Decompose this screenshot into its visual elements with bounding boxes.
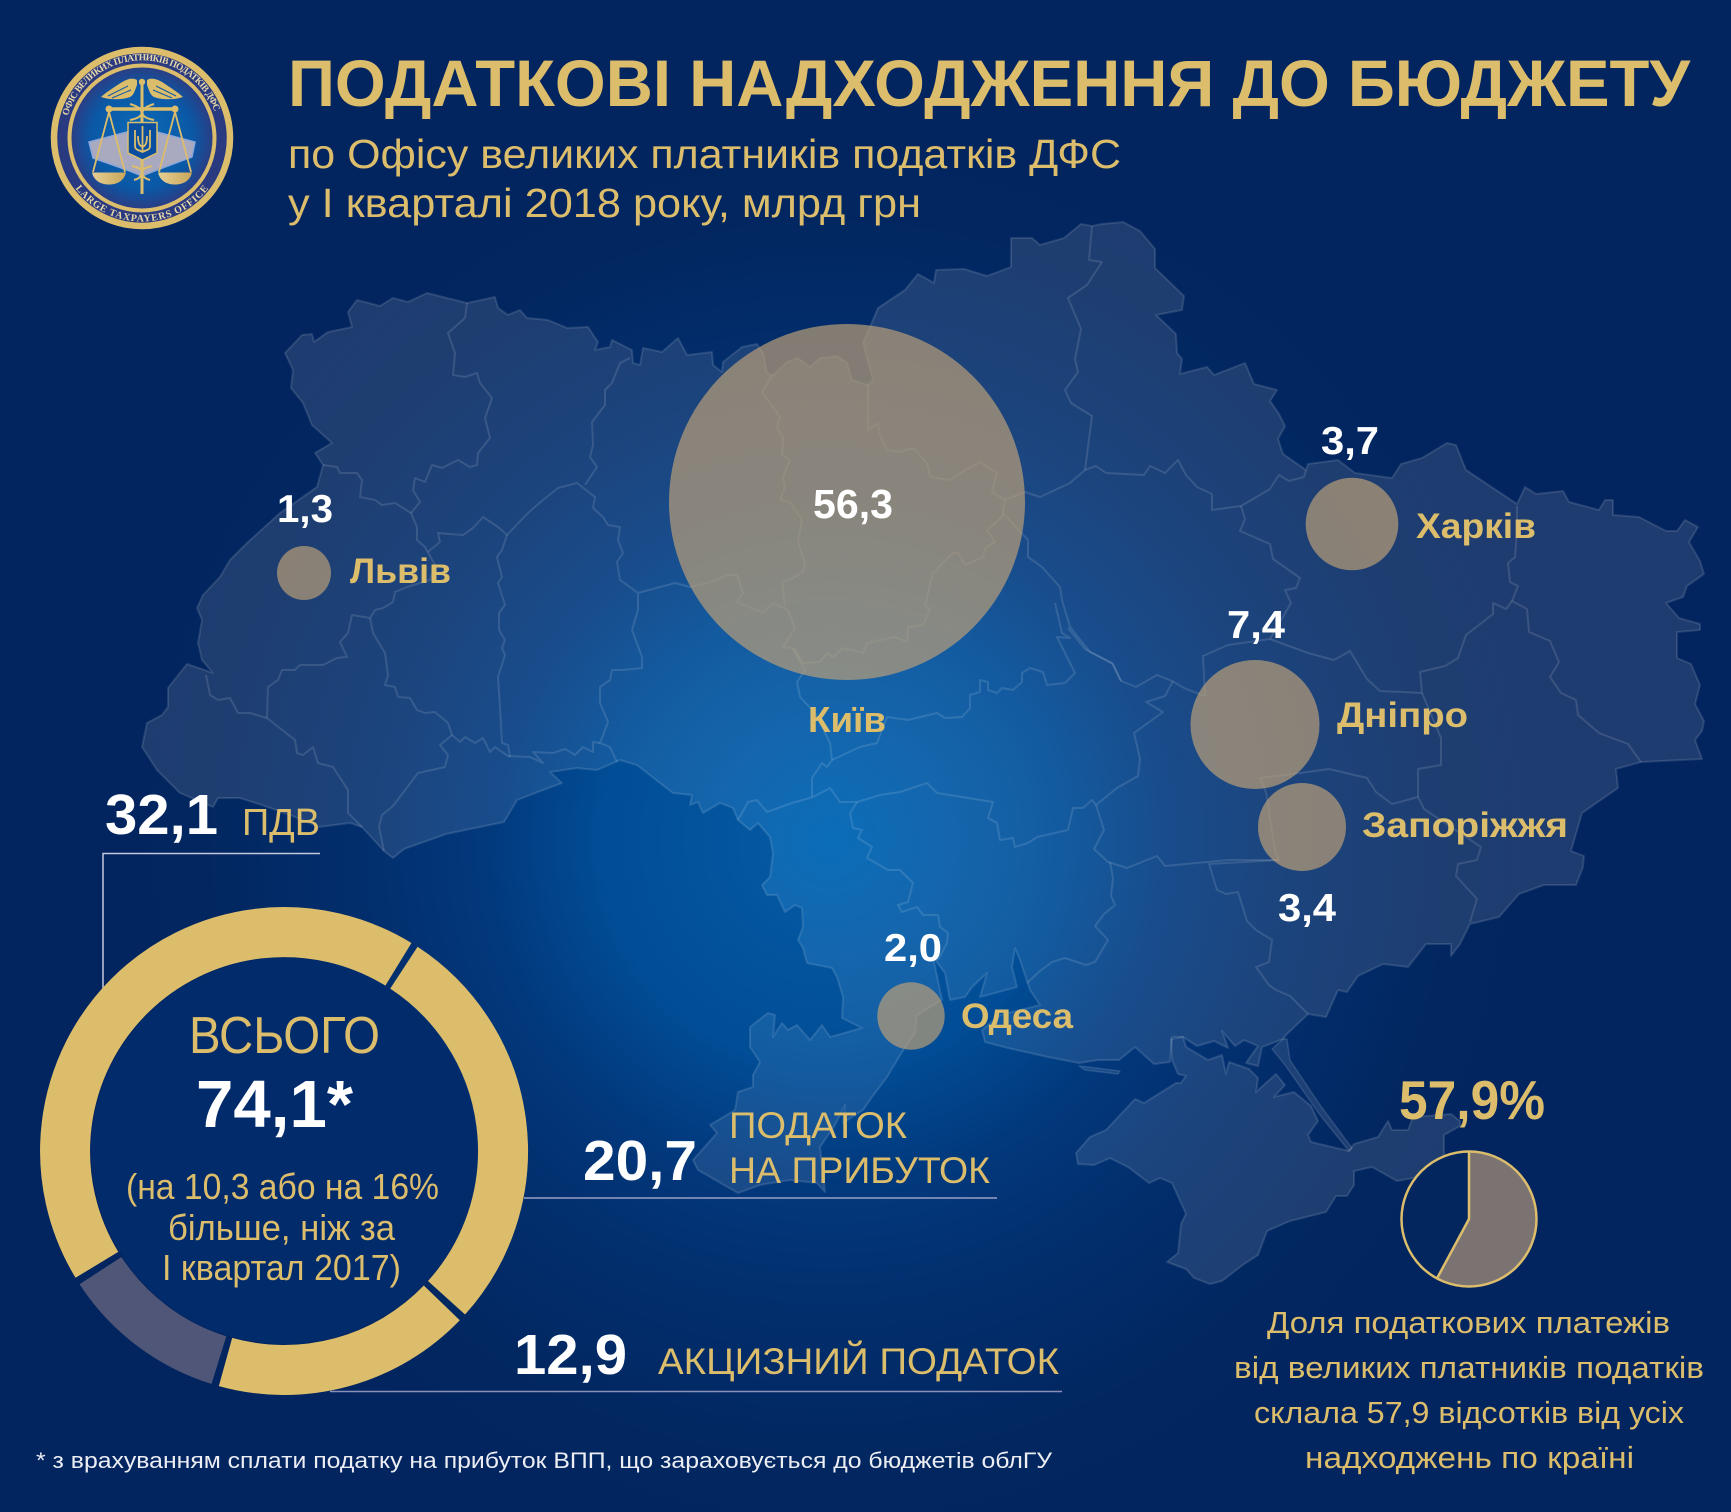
label: Kharkiv: Харків (1416, 507, 1536, 546)
logo: beam knobs and pans (92, 106, 192, 184)
map of Ukraine (142, 222, 1704, 1284)
excise value and label (514, 1323, 1059, 1387)
donut: comparison note (126, 1166, 439, 1288)
logo: Large Taxpayers Office seal (50, 46, 234, 230)
bubble: Kharkiv (1306, 420, 1536, 570)
label: Zaporizhzhia: Запоріжжя (1362, 806, 1568, 845)
logo: balance beam and scales (93, 104, 191, 180)
profit tax value and label: НА ПРИБУТОК (729, 1150, 990, 1191)
logo: bottom arc text: LARGE TAXPAYERS OFFICE (75, 184, 208, 222)
excise value and label: 12,9 (514, 1323, 627, 1387)
share description: Доля податкових платежів (1267, 1305, 1670, 1340)
VAT value and label (105, 783, 320, 847)
label: Dnipro: Дніпро (1337, 696, 1468, 735)
subtitle: у І кварталі 2018 року, млрд грн (288, 180, 921, 226)
subtitle: по Офісу великих платників податків ДФС (288, 131, 1121, 177)
label: Kyiv: Київ (808, 699, 886, 740)
VAT value and label: ПДВ (242, 802, 320, 844)
map: Arabat spit and Dzharylhach island (1079, 1039, 1352, 1151)
subtitle (288, 131, 1121, 226)
donut: total value: 74,1* (196, 1067, 354, 1142)
pie chart: share of large taxpayers (1402, 1152, 1537, 1286)
bubble: Dnipro (1190, 604, 1468, 789)
donut: inner disc (91, 958, 477, 1344)
profit tax value and label (583, 1105, 990, 1193)
bubble: Zaporizhzhia (1258, 783, 1568, 930)
VAT value and label: 32,1 (105, 783, 218, 847)
value: Kharkiv: 3,7 (1321, 420, 1379, 463)
donut chart: total revenue (65, 932, 503, 1370)
excise value and label: АКЦИЗНИЙ ПОДАТОК (658, 1340, 1059, 1382)
share description: склала 57,9 відсотків від усіх (1254, 1395, 1685, 1430)
leader line: excise (330, 1390, 1062, 1392)
share description: від великих платників податків (1234, 1350, 1704, 1385)
bubble: Kyiv (669, 324, 1025, 740)
value: Dnipro: 7,4 (1227, 604, 1285, 647)
leader line: VAT (103, 854, 320, 990)
logo: book shape (89, 132, 195, 176)
donut: profit tax segment (404, 968, 503, 1298)
footnote: * з врахуванням сплати податку на прибуток ВПП, що зараховується до бюджетів облГУ (36, 1448, 1053, 1473)
value: Kyiv: 56,3 (813, 481, 893, 527)
bubble: Odesa (877, 927, 1074, 1050)
donut: total heading: ВСЬОГО (189, 1007, 380, 1065)
donut: excise segment (226, 1303, 442, 1370)
leader line: profit tax (524, 1197, 997, 1199)
donut: comparison note: І квартал 2017) (162, 1247, 401, 1288)
donut: other taxes segment (100, 1271, 219, 1360)
profit tax value and label: ПОДАТОК (729, 1105, 907, 1146)
donut: comparison note: (на 10,3 або на 16% (126, 1166, 439, 1207)
share description (1234, 1305, 1704, 1475)
share description: надходжень по країні (1305, 1440, 1634, 1475)
map: oblast boundaries (206, 226, 1641, 1014)
value: Zaporizhzhia: 3,4 (1278, 887, 1336, 930)
bubble: Lviv (277, 488, 451, 600)
map: mainland silhouette (142, 222, 1704, 1193)
value: Lviv: 1,3 (277, 488, 333, 531)
profit tax value and label: 20,7 (583, 1129, 697, 1193)
logo: top arc text: ОФІС ВЕЛИКИХ ПЛАТНИКІВ ПОДАТКІВ ДФС (62, 54, 220, 115)
donut: VAT segment (65, 932, 398, 1265)
label: Lviv: Львів (350, 552, 451, 591)
logo: staff and wings (101, 79, 183, 194)
donut: comparison note: більше, ніж за (168, 1207, 396, 1248)
logo: shield with trident (128, 122, 157, 160)
map: Crimea (1076, 1037, 1460, 1284)
title: ПОДАТКОВІ НАДХОДЖЕННЯ ДО БЮДЖЕТУ (288, 46, 1691, 120)
share percentage: 57,9% (1399, 1069, 1545, 1131)
label: Odesa: Одеса (961, 997, 1074, 1036)
value: Odesa: 2,0 (884, 927, 942, 970)
